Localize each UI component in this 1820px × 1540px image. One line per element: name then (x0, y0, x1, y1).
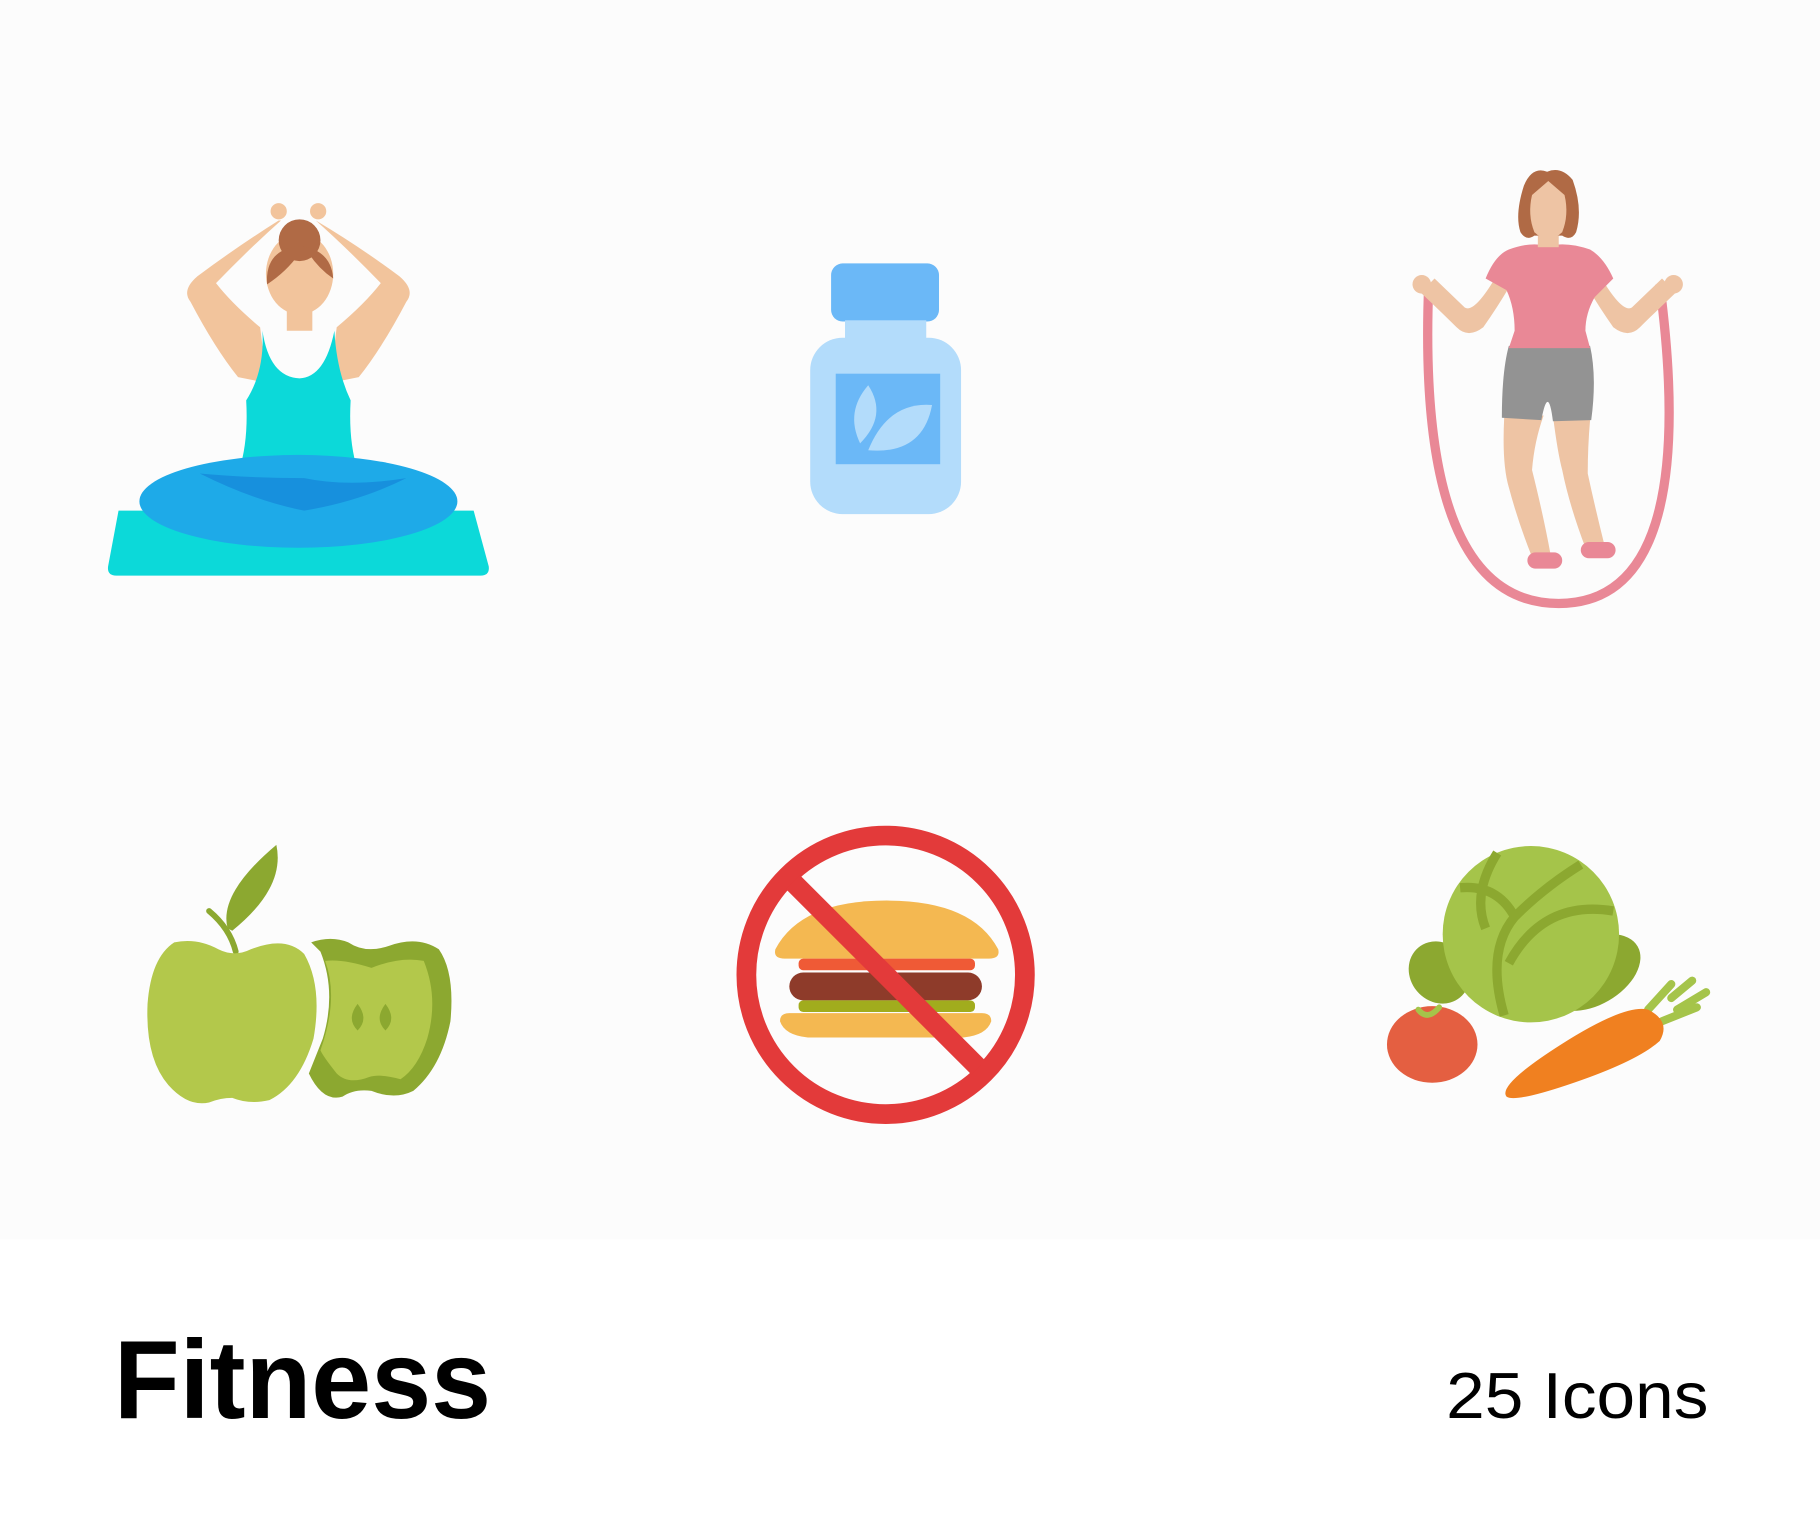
torso (239, 331, 358, 470)
title: Fitness (114, 1317, 491, 1442)
rope (1428, 284, 1669, 603)
subtitle: icon count: 25 Icons (1446, 1359, 1708, 1432)
arms (187, 220, 281, 383)
legs (1504, 415, 1551, 557)
mat (108, 511, 489, 576)
icon: apples (147, 845, 451, 1103)
shirt (1486, 244, 1613, 348)
legs (139, 455, 457, 548)
icon: no burger (746, 836, 1025, 1114)
neck and head (287, 296, 312, 331)
head (1538, 226, 1559, 247)
icon: yoga woman (108, 203, 489, 576)
shorts (1502, 346, 1594, 421)
arms (1421, 279, 1509, 333)
icon: vegetables (1387, 846, 1706, 1098)
icon: jump rope woman (1413, 170, 1683, 603)
icon: supplement bottle (810, 263, 961, 514)
